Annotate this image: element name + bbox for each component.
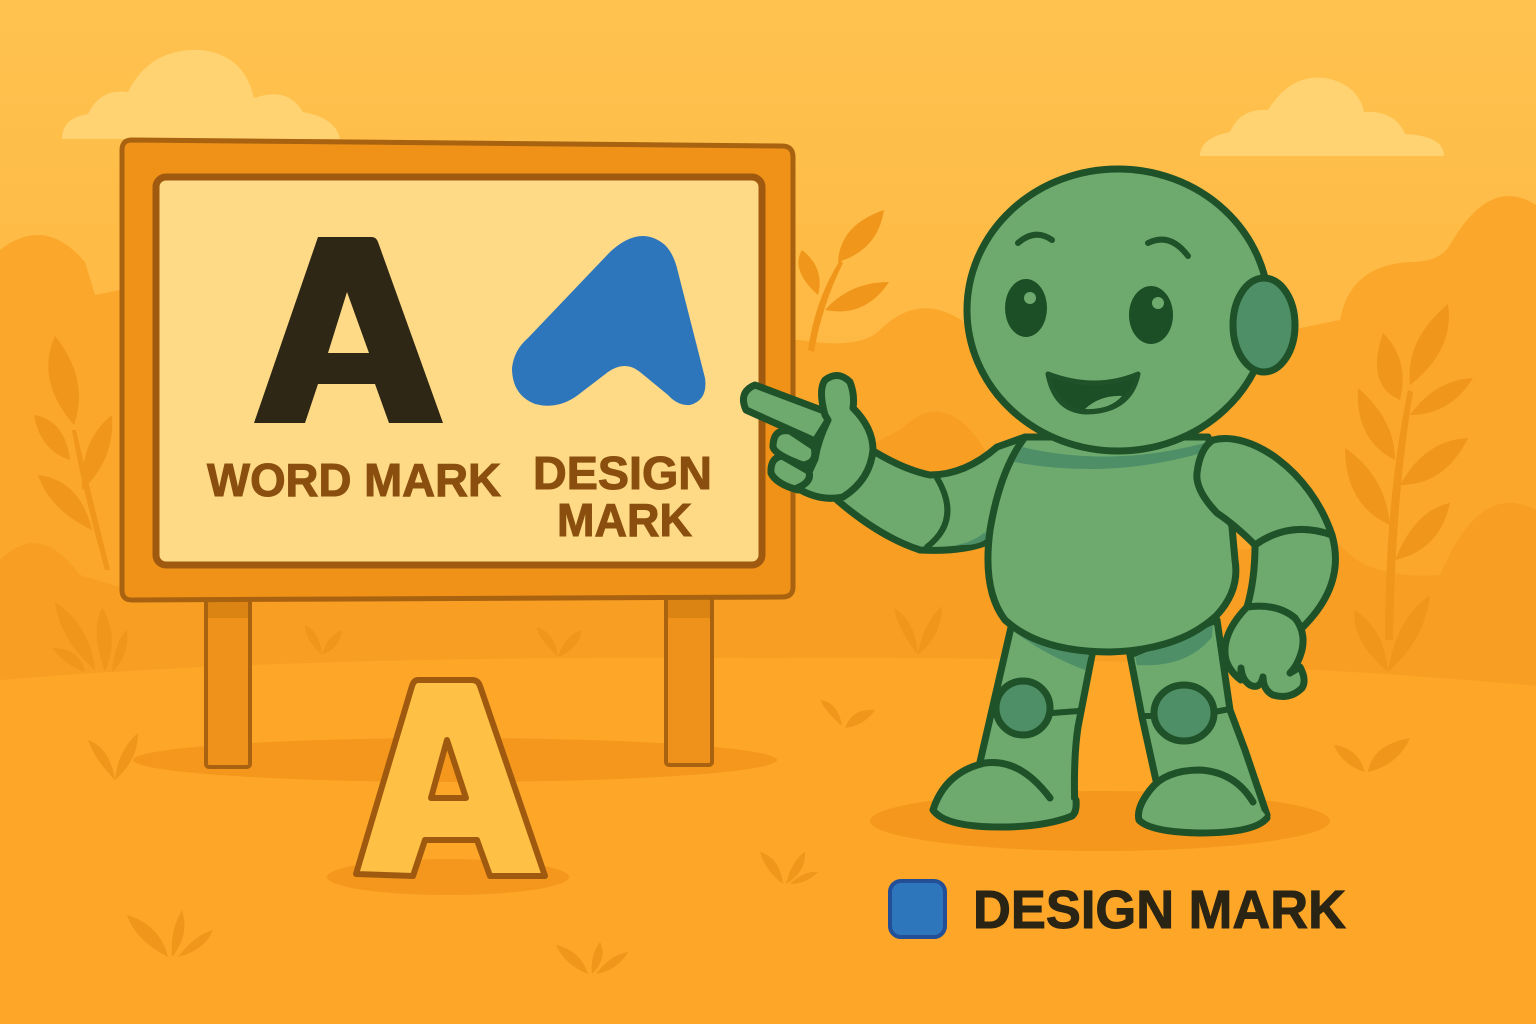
billboard post right <box>666 590 712 765</box>
robot head <box>967 169 1269 451</box>
robot neck shadow <box>1014 443 1205 469</box>
ground shadow: robot <box>870 791 1330 851</box>
robot brows <box>1018 235 1188 256</box>
word mark label: WORD MARK <box>207 454 501 506</box>
design mark label: DESIGN <box>533 447 712 499</box>
ground <box>0 658 1536 1024</box>
robot right hand <box>1225 606 1304 696</box>
leg shading <box>1015 625 1213 670</box>
word mark letter A <box>254 237 443 423</box>
billboard post left <box>206 590 250 767</box>
design mark label <box>533 447 712 546</box>
robot <box>743 169 1335 833</box>
robot right foot <box>1138 770 1267 833</box>
robot left leg <box>980 623 1092 812</box>
design mark logo <box>512 236 705 406</box>
legend label: DESIGN MARK <box>973 880 1346 940</box>
robot body <box>988 437 1236 652</box>
robot eyes <box>1005 279 1173 344</box>
robot right knee <box>1143 685 1230 741</box>
robot left foot <box>932 762 1076 827</box>
robot pointing arm <box>837 437 1025 550</box>
back hills <box>0 196 1536 690</box>
robot pointing hand <box>743 375 873 498</box>
cloud right <box>1200 78 1444 156</box>
design mark label: MARK <box>557 494 692 546</box>
ground shadow: letter A <box>327 859 569 895</box>
robot right arm <box>1197 438 1335 627</box>
background plants <box>34 210 1473 974</box>
billboard frame <box>122 140 793 600</box>
billboard panel <box>156 177 762 565</box>
robot right leg <box>1130 620 1267 815</box>
ground shadow: billboard <box>133 738 777 782</box>
front hills <box>0 412 1536 700</box>
robot left knee <box>996 681 1079 735</box>
cloud left <box>62 50 340 139</box>
robot mouth <box>1048 374 1138 412</box>
standing letter A <box>356 680 545 876</box>
robot ear <box>1233 278 1295 372</box>
legend swatch <box>890 881 945 937</box>
